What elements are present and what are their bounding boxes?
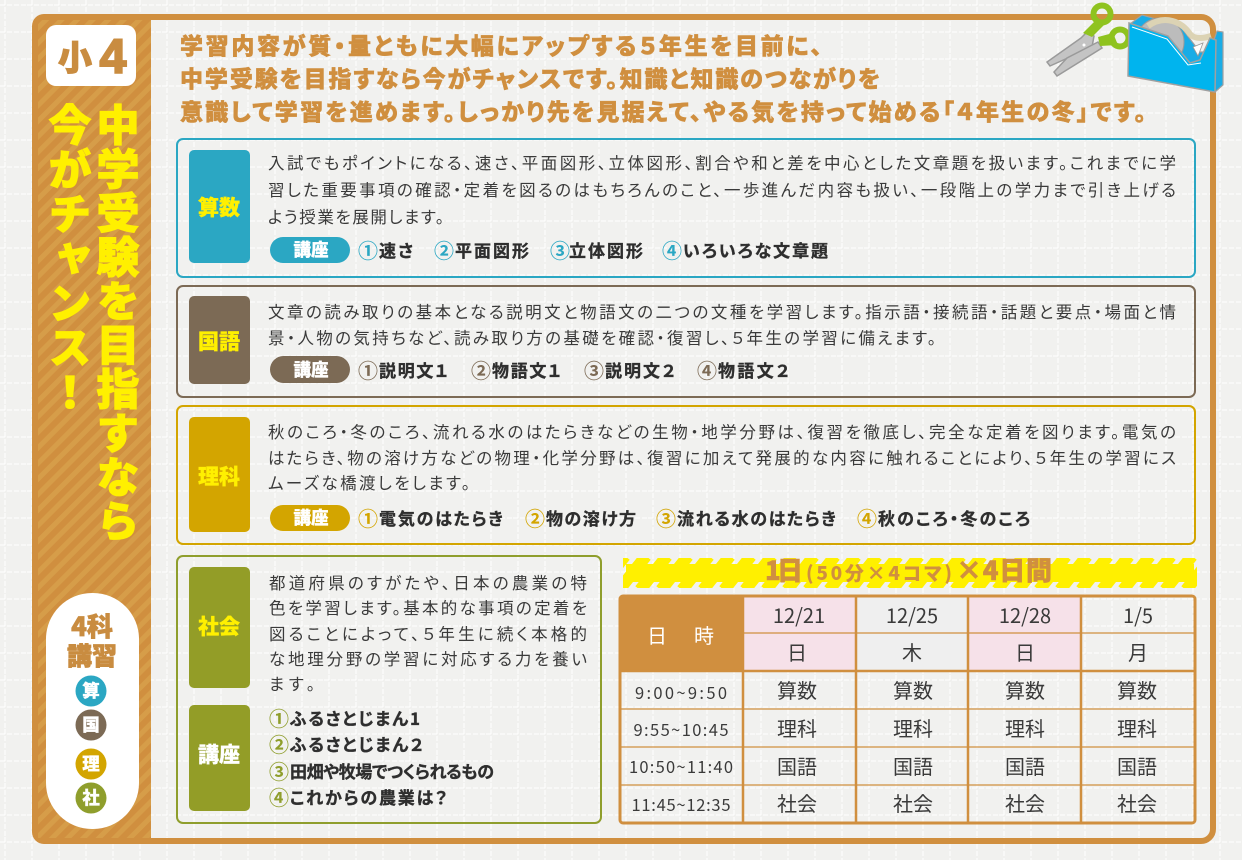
schedule heading: 1日 (765, 551, 803, 588)
social courses: ② (269, 729, 289, 758)
table subjects: 社会 (893, 788, 933, 817)
table subjects: 社会 (777, 788, 817, 817)
table subjects: 国語 (893, 751, 933, 780)
social courses: ① (269, 703, 289, 732)
social courses: これからの農業は？ (290, 784, 447, 809)
four subjects badge: 理 (82, 751, 100, 776)
table subjects: 理科 (893, 713, 933, 742)
social description (269, 570, 587, 695)
science courses: ③ (656, 503, 676, 532)
grade badge: 小 (58, 31, 92, 80)
japanese courses (270, 355, 789, 384)
social label (189, 567, 250, 688)
social courses: ふるさとじまん２ (290, 731, 423, 756)
table time column: 11:45~12:35 (632, 792, 730, 816)
table header: 日 (647, 620, 667, 649)
social courses (269, 703, 494, 811)
panel: math (177, 139, 1195, 277)
japanese courses: 物語文１ (492, 357, 561, 382)
japanese description: 文章の読み取りの基本となる説明文と物語文の二つの文種を学習します。指示語・接続語・話題と要点・場面と情 (268, 299, 1176, 323)
science courses: 流れる水のはたらき (677, 505, 836, 530)
japanese courses: 物語文２ (718, 357, 789, 382)
math courses: 平面図形 (455, 237, 529, 262)
table subjects: 理科 (777, 713, 817, 742)
intro text: 中学受験を目指すなら今がチャンスです。知識と知識のつながりを (180, 60, 880, 94)
table header: 日 (787, 637, 807, 666)
japanese label: 国語 (198, 326, 240, 356)
four subjects badge: 社 (82, 785, 100, 810)
schedule heading (623, 551, 1197, 588)
panel: japanese (177, 286, 1195, 397)
vertical headline: 中学受験を目指すなら (87, 103, 149, 543)
social description: 図ることによって、５年生に続く本格的 (269, 621, 587, 645)
table subjects: 算数 (1117, 675, 1157, 704)
social label: 社会 (198, 611, 240, 641)
japanese courses: ④ (697, 355, 717, 384)
icon: tape dispenser (1128, 15, 1223, 92)
math description: よう授業を展開します。 (268, 204, 444, 228)
science label (189, 417, 250, 532)
math courses: 速さ (379, 237, 413, 262)
table subjects (777, 675, 1157, 817)
japanese courses: ③ (584, 355, 604, 384)
math courses: ③ (550, 235, 570, 264)
schedule heading: ×4日間 (956, 551, 1052, 588)
icon: scissors (1047, 6, 1128, 76)
science courses: 物の溶け方 (546, 505, 636, 530)
four subjects badge: 算 (82, 678, 100, 703)
science courses: ① (358, 503, 378, 532)
four subjects badge: 4科 (71, 607, 113, 644)
social courses: ④ (269, 782, 289, 811)
social course label (189, 705, 250, 811)
social courses: 田畑や牧場でつくられるもの (290, 758, 494, 783)
science description: 秋のころ・冬のころ、流れる水のはたらきなどの生物・地学分野は、復習を徹底し、完全な定着を図ります。電気の (268, 419, 1176, 443)
table header: 1/5 (1123, 600, 1153, 629)
table header: 月 (1128, 637, 1148, 666)
table header: 12/21 (773, 600, 825, 629)
table header: 12/28 (999, 600, 1051, 629)
social courses: ③ (269, 756, 289, 785)
table header: 時 (694, 620, 714, 649)
table time column (629, 680, 733, 816)
science description: はたらき、物の溶け方などの物理・化学分野は、復習に加えて発展的な内容に触れることにより、５年生の学習にス (268, 445, 1176, 469)
social description: 都道府県のすがたや、日本の農業の特 (269, 570, 587, 594)
science description: ムーズな橋渡しをします。 (268, 470, 470, 494)
science courses: 秋のころ・冬のころ (878, 505, 1030, 530)
japanese courses: ① (358, 355, 378, 384)
japanese description: 景・人物の気持ちなど、読み取り方の基礎を確認・復習し、５年生の学習に備えます。 (268, 325, 936, 349)
math label (189, 150, 250, 263)
sidebar (32, 14, 151, 844)
japanese label (189, 296, 250, 384)
social courses: ふるさとじまん1 (290, 705, 420, 730)
table header: 12/25 (886, 600, 938, 629)
vertical headline (39, 103, 149, 543)
math courses: いろいろな文章題 (683, 237, 828, 262)
panel: science (177, 406, 1195, 544)
math label: 算数 (198, 192, 240, 222)
four subjects badge (46, 593, 139, 829)
japanese courses: 説明文２ (605, 357, 675, 382)
japanese courses: 講座 (294, 357, 329, 382)
table header: 日 (1015, 637, 1035, 666)
math courses: 立体図形 (569, 237, 643, 262)
science courses: ② (525, 503, 545, 532)
math description (268, 150, 1176, 228)
social description: な地理分野の学習に対応する力を養い (269, 646, 587, 670)
social description: ます。 (269, 671, 315, 695)
table subjects: 算数 (893, 675, 933, 704)
japanese courses: ② (471, 355, 491, 384)
four subjects badge: 国 (82, 712, 100, 737)
math courses (270, 235, 828, 264)
math description: 入試でもポイントになる、速さ、平面図形、立体図形、割合や和と差を中心とした文章題を扱います。これまでに学 (268, 150, 1176, 174)
table subjects: 国語 (777, 751, 817, 780)
intro text (180, 27, 1146, 127)
schedule table (620, 596, 1195, 823)
table time column: 9:00~9:50 (635, 680, 727, 704)
panel: social studies (177, 556, 601, 823)
grade badge (46, 25, 136, 86)
table subjects: 国語 (1117, 751, 1157, 780)
japanese description (268, 299, 1176, 349)
four subjects badge: 講習 (67, 637, 117, 673)
schedule heading: (50分×4コマ) (806, 559, 952, 586)
math courses: ② (434, 235, 454, 264)
math description: 習した重要事項の確認・定着を図るのはもちろんのこと、一歩進んだ内容も扱い、一段階上の学力まで引き上げる (268, 177, 1176, 201)
table subjects: 理科 (1005, 713, 1045, 742)
table subjects: 社会 (1005, 788, 1045, 817)
intro text: 意識して学習を進めます。しっかり先を見据えて、やる気を持って始める「４年生の冬」です。 (180, 93, 1146, 127)
table subjects: 社会 (1117, 788, 1157, 817)
intro text: 学習内容が質・量ともに大幅にアップする５年生を目前に、 (180, 27, 822, 61)
table subjects: 理科 (1117, 713, 1157, 742)
social description: 色を学習します。基本的な事項の定着を (269, 595, 587, 619)
table header (647, 600, 1153, 666)
table time column: 10:50~11:40 (629, 754, 733, 778)
japanese courses: 説明文１ (379, 357, 448, 382)
science courses (270, 503, 1030, 532)
math courses: ④ (662, 235, 682, 264)
table subjects: 算数 (1005, 675, 1045, 704)
table time column: 9:55~10:45 (634, 717, 728, 741)
math courses: ① (358, 235, 378, 264)
table header: 木 (902, 637, 922, 666)
table subjects: 国語 (1005, 751, 1045, 780)
science label: 理科 (198, 461, 240, 491)
science courses: 電気のはたらき (379, 505, 503, 530)
math courses: 講座 (294, 237, 329, 262)
grade badge: 4 (100, 31, 127, 84)
science courses: ④ (857, 503, 877, 532)
vertical headline: 今がチャンス！ (39, 103, 101, 414)
social course label: 講座 (198, 739, 240, 769)
science description (268, 419, 1176, 494)
science courses: 講座 (294, 505, 329, 530)
table subjects: 算数 (777, 675, 817, 704)
